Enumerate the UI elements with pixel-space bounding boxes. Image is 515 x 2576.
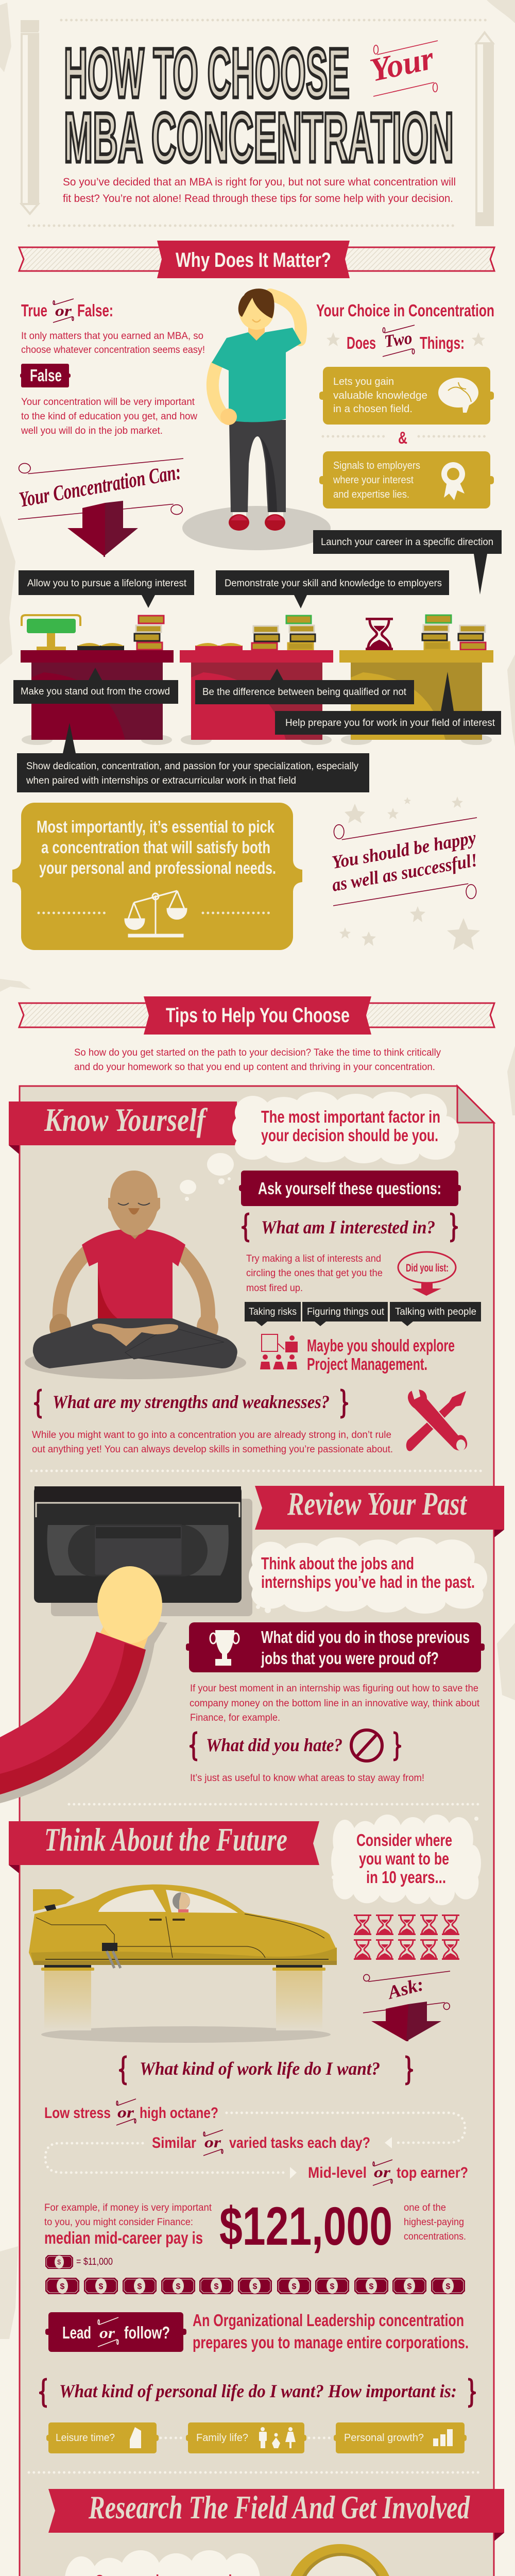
panel: most importantly: Most importantly, it’s essential to pick: [37, 817, 274, 836]
card: signals to employers: [319, 451, 494, 509]
text: maybe project management: Project Management.: [307, 1354, 427, 1374]
callout: stand out: Make you stand out from the crowd: [21, 686, 170, 697]
text: finance example: Finance, for example.: [190, 1713, 280, 1723]
callout: demonstrate skill: [216, 570, 449, 608]
card: signals to employers: Signals to employers: [333, 460, 420, 471]
shadows: [341, 735, 492, 745]
tag: talking with people: Talking with people: [395, 1307, 476, 1317]
script text: [330, 818, 479, 906]
question: what did you hate: [191, 1730, 400, 1761]
legend: bill equals $11,000: $: [57, 2258, 61, 2266]
ribbon heading: Think About the Future: [44, 1821, 287, 1858]
choice: mid-level or top earner: [308, 2160, 468, 2185]
callout: launch career: [313, 530, 502, 595]
choice: similar or varied: [152, 2130, 370, 2156]
callout: qualified or not: [195, 669, 414, 704]
icon: hourglass: [366, 618, 393, 650]
callout: qualified or not: Be the difference between being qualified or not: [202, 687, 407, 698]
sleeve: [0, 1632, 146, 1794]
header panel: [21, 20, 494, 226]
intro text: So you’ve decided that an MBA is right for you, but not sure what concentration will: [63, 176, 456, 188]
thought cloud: [331, 1815, 481, 1905]
text: make a list: circling the ones that get you the: [246, 1268, 383, 1279]
decoration: top dotted rule: [61, 19, 486, 22]
pictogram: eleven bills: $: [138, 2282, 142, 2291]
icon: right pencil: [475, 32, 494, 225]
text: make a list: [246, 1253, 383, 1294]
podium: maroon with lamp and books: [21, 615, 174, 745]
heading: Things:: [420, 333, 465, 352]
box: lead or follow: Lead: [62, 2323, 91, 2342]
script: or: or: [55, 302, 72, 319]
question: interested: [243, 1214, 457, 1241]
icon: family: [259, 2427, 296, 2448]
box: lead or follow: or: [99, 2325, 115, 2342]
ground shadow: [41, 2026, 331, 2043]
desk body: [31, 663, 163, 740]
pictogram: eleven bills: $: [446, 2282, 451, 2291]
text: maybe project management: [307, 1336, 455, 1374]
circle: did you list: Did you list:: [406, 1262, 449, 1274]
foot: [92, 1324, 178, 1346]
card: gain knowledge: valuable knowledge: [333, 390, 427, 401]
head: [108, 1171, 160, 1235]
choice: mid-level or top earner: top earner?: [397, 2164, 468, 2181]
driver: [173, 1892, 190, 1912]
card: gain knowledge: [319, 367, 494, 425]
podium: crimson with books: [180, 616, 333, 745]
statistic: median mid-career pay: For example, if money is very important: [44, 2202, 212, 2213]
pictogram: eleven bills: $: [292, 2282, 297, 2291]
badge: False: False: [30, 366, 62, 385]
ribbon heading: [9, 1821, 319, 1873]
ribbon heading: [255, 1485, 504, 1537]
card: personal growth: Personal growth?: [344, 2432, 424, 2444]
panel: most importantly: a concentration that will satisfy both: [41, 838, 270, 857]
statistic: median mid-career pay: to you, you might consider Finance:: [44, 2217, 193, 2228]
pictogram: eleven bills: $: [407, 2282, 412, 2291]
hand: [98, 1623, 153, 1656]
choice: low stress or high octane: or: [117, 2104, 134, 2121]
right column: Your Choice in Concentration: [316, 301, 494, 509]
icon: magnifying glass: [286, 2544, 480, 2576]
tips intro text: [74, 1047, 441, 1073]
section: Know Yourself: [9, 1092, 481, 1455]
callout: lifelong interest: Allow you to pursue a lifelong interest: [27, 578, 187, 589]
path: dotted connector left: [45, 2143, 297, 2179]
thought cloud: Consider where: [356, 1831, 452, 1850]
box: ask yourself: [239, 1171, 461, 1206]
circle: did you list: [398, 1252, 456, 1296]
statistic: median mid-career pay: median mid-career pay is: [44, 2228, 203, 2247]
shadows: [181, 735, 332, 745]
statement text: It only matters that you earned an MBA, so: [21, 331, 203, 342]
callout: lifelong interest: [19, 570, 194, 608]
callout: launch career: Launch your career in a specific direction: [321, 537, 493, 548]
statistic: median mid-career pay: one of the: [404, 2202, 446, 2213]
card: family life: Family life?: [196, 2432, 248, 2444]
tape body: [34, 1486, 242, 1603]
text: maybe project management: Maybe you should explore: [307, 1336, 455, 1355]
icon: presenter and audience: [260, 1334, 297, 1369]
callout: happy and successful: [330, 796, 480, 950]
card: leisure time: [46, 2422, 159, 2453]
arrow: down: [371, 2002, 441, 2041]
thought cloud: your decision should be you.: [261, 1126, 438, 1145]
callout: show dedication: Show dedication, concentration, and passion for your specialization, especially: [26, 761, 358, 772]
icon: stars: [327, 332, 485, 346]
script text: You should be happy: [330, 827, 478, 873]
banner: Why Does It Matter?: Why Does It Matter?: [176, 249, 331, 272]
question: strengths and weaknesses: [35, 1390, 347, 1417]
box: lead or follow: follow?: [124, 2323, 170, 2342]
right arm raised: [270, 295, 301, 340]
callout: demonstrate skill: Demonstrate your skill and knowledge to employers: [225, 578, 442, 589]
tag: figuring things out: [302, 1302, 388, 1326]
pictogram: eleven bills: $: [330, 2282, 335, 2291]
left column: True or False: [20, 299, 205, 436]
text: develop skills: out anything yet! You can always develop skills in something you’re passionate about.: [32, 1444, 393, 1455]
panel: tips sheet: [0, 1086, 515, 2576]
icon: bars: [433, 2429, 453, 2446]
icon: prohibition sign: [351, 1730, 382, 1761]
pictogram: eleven bills: $: [99, 2282, 104, 2291]
icon: book stacks: [252, 616, 315, 650]
card: personal growth: [334, 2422, 467, 2453]
legend: bill equals $11,000: = $11,000: [76, 2257, 113, 2267]
card: signals to employers: where your interest: [333, 474, 414, 486]
spoiler: [33, 1889, 75, 1911]
windows: [98, 1890, 166, 1912]
pictogram: eleven bills: $: [176, 2282, 181, 2291]
answer text: Your concentration will be very important: [21, 397, 195, 408]
statistic: median mid-career pay: $121,000: [219, 2196, 392, 2257]
text: organizational leadership: [193, 2311, 469, 2352]
thought cloud: you want to be: [359, 1849, 449, 1868]
shadows: [22, 735, 172, 745]
statistic: median mid-career pay: concentrations.: [404, 2231, 466, 2242]
script: or: [53, 299, 74, 323]
icon: scales: [125, 891, 186, 937]
arm shadow: [0, 1620, 167, 1803]
icon: book: [130, 2427, 141, 2448]
left arm: [213, 366, 225, 417]
illustration: VHS tape in hand: [0, 1486, 252, 1803]
tag: talking with people: [390, 1302, 481, 1326]
choice: similar or varied: or: [204, 2134, 221, 2151]
choice: similar or varied: varied tasks each day?: [229, 2134, 370, 2151]
legend: bill equals $11,000: [45, 2255, 113, 2269]
text: make a list: Try making a list of interests and: [246, 1253, 381, 1264]
pants: [229, 420, 286, 512]
heading: True or False: True: [21, 301, 47, 320]
socks: [233, 512, 283, 517]
text: finance example: company money on the bottom line in an innovative way, think about: [190, 1698, 480, 1709]
box: what did you do: [186, 1622, 485, 1672]
panel: most importantly: [12, 803, 302, 950]
text: make a list: most fired up.: [246, 1283, 303, 1294]
section: Your Concentration Can: [13, 459, 502, 792]
callout: help prepare: [275, 672, 501, 735]
icon: open book: [77, 643, 124, 650]
badge: False: [20, 364, 71, 387]
callout: show dedication: [17, 723, 369, 792]
callout: stand out: [13, 668, 178, 704]
illustration: flying car: [29, 1885, 337, 2043]
box: ask yourself: Ask yourself these questions:: [258, 1179, 441, 1198]
hair: [238, 289, 274, 318]
heading: True or False: False:: [77, 301, 113, 320]
question: work life: What kind of work life do I want?: [140, 2058, 380, 2079]
answer text: to the kind of education you get, and how: [21, 411, 197, 422]
statistic: median mid-career pay: highest-paying: [404, 2217, 464, 2228]
intro text: fit best? You’re not alone! Read through these tips for some help with your decision.: [63, 193, 453, 205]
thought cloud: The most important factor in: [261, 1107, 440, 1126]
tag: figuring things out: Figuring things out: [307, 1307, 385, 1317]
text: develop skills: [32, 1430, 393, 1455]
text: finance example: [190, 1683, 480, 1723]
choice: low stress or high octane: high octane?: [140, 2105, 218, 2122]
statement text: [21, 331, 205, 355]
callout: help prepare: Help prepare you for work in your field of interest: [285, 718, 495, 728]
box: what did you do: jobs that you were proud of?: [261, 1649, 439, 1668]
answer text: well you will do in the job market.: [21, 426, 163, 436]
script: Two: Two: [383, 329, 414, 351]
statement text: choose whatever concentration seems easy!: [21, 345, 205, 355]
tips intro text: and do your homework so that you end up content and thriving in your concentration.: [74, 1062, 435, 1073]
question: work life: [120, 2057, 412, 2084]
face: [118, 1203, 150, 1205]
ribbon heading: [9, 1101, 237, 1154]
question: interested: What am I interested in?: [261, 1217, 435, 1238]
thought cloud: in 10 years...: [366, 1868, 446, 1887]
door lines and pipes: [36, 1914, 324, 1958]
thruster caps: [41, 1968, 325, 1971]
tips intro text: So how do you get started on the path to your decision? Take the time to think critically: [74, 1047, 441, 1058]
pictogram: eleven bills: $: [253, 2282, 258, 2291]
neck: [124, 1221, 144, 1239]
text: stay away: It’s just as useful to know what areas to stay away from!: [190, 1773, 424, 1784]
choice: low stress or high octane: [44, 2099, 218, 2125]
icon: book stacks: [422, 615, 486, 650]
body: [29, 1885, 337, 1964]
shirt: [212, 328, 301, 422]
icon: book stack: [134, 616, 164, 650]
icon: left pencil: [21, 21, 39, 214]
ribbon heading: Know Yourself: [44, 1101, 208, 1138]
illustration: man scratching head: [182, 289, 331, 550]
script with arrow: Ask: [363, 1971, 450, 2041]
desk body: [351, 663, 482, 740]
heading: True or False: [21, 301, 113, 320]
question: strengths and weaknesses: What are my strengths and weaknesses?: [53, 1392, 330, 1412]
tag: taking risks: [245, 1302, 301, 1326]
thrust beams: [44, 1971, 91, 2030]
divider: ampersand: &: [398, 428, 407, 447]
question: personal life: What kind of personal life do I want? How important is:: [59, 2381, 457, 2401]
heading: [316, 301, 494, 352]
banner: Tips to Help You Choose: Tips to Help You Choose: [166, 1004, 350, 1027]
script heading: Your Concentration Can:: [18, 460, 183, 512]
thought cloud: [180, 1092, 459, 1201]
ribbon heading: [48, 2489, 504, 2541]
icon: brain: [438, 378, 478, 413]
legs: [33, 1318, 237, 1368]
icon: crossed wrench and screwdriver: [406, 1389, 468, 1451]
choice: low stress or high octane: Low stress: [44, 2105, 111, 2122]
section: Research the Field: [36, 2489, 515, 2576]
statistic: median mid-career pay: [44, 2196, 466, 2257]
intro text: [63, 176, 456, 205]
icon: hourglass grid: [354, 1914, 459, 1960]
card: leisure time: Leisure time?: [56, 2432, 115, 2444]
text: develop skills: While you might want to go into a concentration you are already strong in, don’t rule: [32, 1430, 391, 1440]
script heading: [18, 459, 183, 519]
heading: Does: [347, 333, 376, 352]
icon: open book: [195, 643, 243, 650]
thought cloud: Think about the jobs and: [261, 1554, 414, 1573]
thought bubbles: [180, 1153, 234, 1201]
thought cloud: [55, 2550, 271, 2576]
choice: similar or varied: Similar: [152, 2134, 196, 2151]
section: Review Your Past: [0, 1485, 504, 1803]
banner: Tips to Help You Choose: [19, 996, 494, 1035]
hand: [220, 409, 237, 425]
shirt: [82, 1229, 185, 1318]
card: gain knowledge: in a chosen field.: [333, 403, 413, 415]
card: signals to employers: and expertise lies.: [333, 489, 409, 500]
choice: mid-level or top earner: Mid-level: [308, 2164, 367, 2181]
title: [64, 34, 454, 177]
banner: Why Does It Matter?: [19, 241, 494, 278]
card: family life: [186, 2422, 306, 2453]
text: finance example: If your best moment in an internship was figuring out how to save the: [190, 1683, 478, 1694]
tag: taking risks: Taking risks: [249, 1307, 297, 1317]
arrow: down: [67, 501, 138, 557]
shoes: [229, 514, 249, 531]
decoration: bottom dotted rule: [29, 225, 453, 227]
icon: award ribbon: [441, 462, 465, 500]
box: lead or follow: [45, 2312, 186, 2352]
script: Your: Your: [367, 39, 437, 89]
icon: desk lamp: [22, 615, 80, 651]
section: Think About the Future: [9, 1815, 481, 2453]
pictogram: eleven bills: [45, 2278, 465, 2294]
neck and face: [248, 319, 265, 341]
pictogram: eleven bills: $: [60, 2282, 65, 2291]
tape shadow: [51, 1499, 252, 1616]
script with arrow: Ask: Ask:: [385, 1974, 426, 2003]
arms: [60, 1249, 208, 1324]
question: what did you hate: What did you hate?: [206, 1735, 342, 1755]
script text: as well as successful!: [330, 850, 479, 895]
pictogram: eleven bills: $: [214, 2282, 219, 2291]
decoration: stars: [339, 796, 480, 950]
icon: trophy: [210, 1630, 239, 1666]
choice: mid-level or top earner: or: [374, 2164, 390, 2181]
podium: gold with hourglass and books: [339, 615, 493, 745]
pictogram: eleven bills: $: [369, 2282, 374, 2291]
answer text: [21, 397, 197, 436]
illustration: meditating person: [25, 1171, 246, 1379]
thought cloud: [249, 1537, 487, 1614]
path: dotted connector right: [227, 2113, 465, 2148]
card: gain knowledge: Lets you gain: [333, 376, 394, 387]
panel: most importantly: your personal and professional needs.: [39, 858, 276, 877]
hands: [49, 1314, 71, 1341]
desk body: [191, 663, 322, 740]
callout: show dedication: when paired with internships or extracurricular work in that field: [26, 775, 296, 786]
